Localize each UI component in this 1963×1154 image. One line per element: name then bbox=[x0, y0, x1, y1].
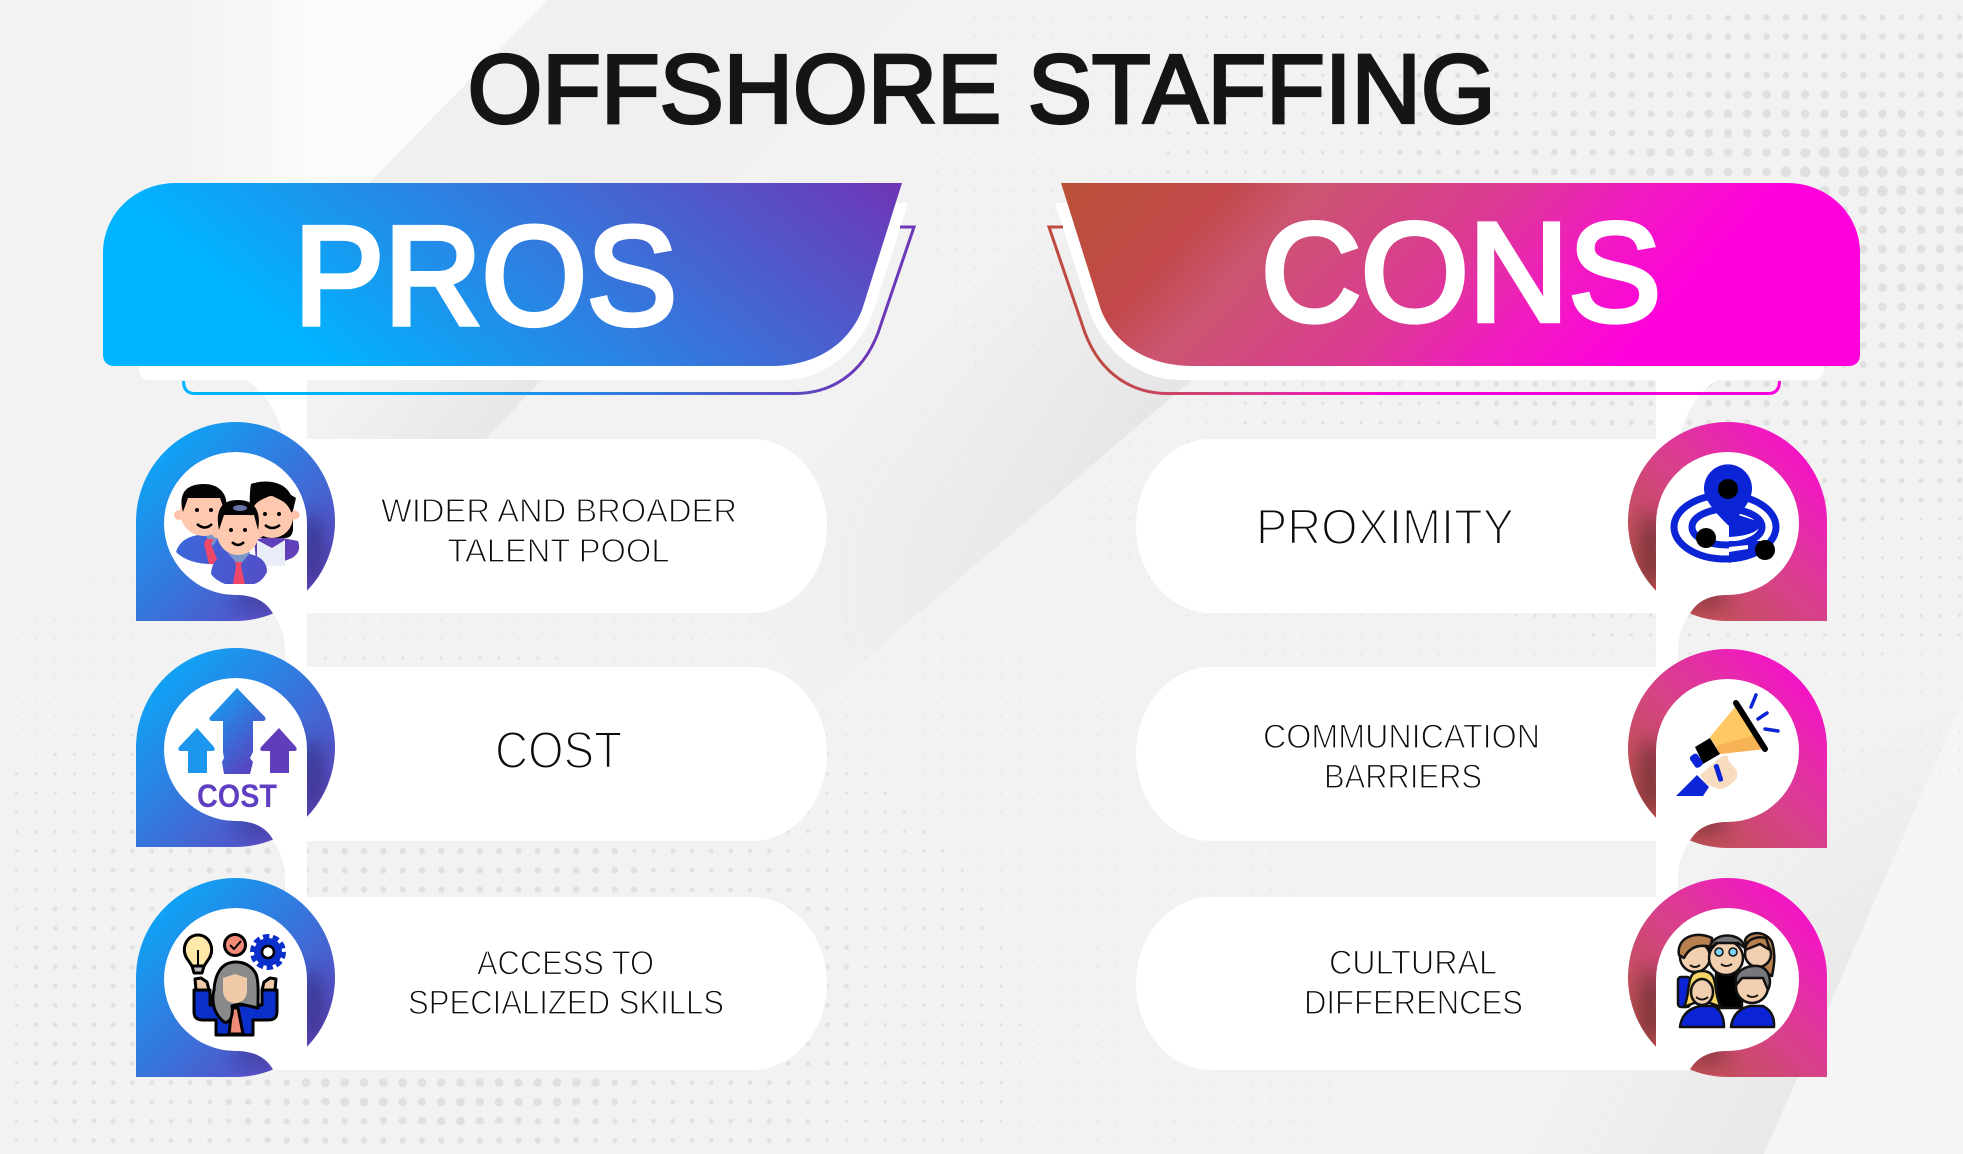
pin: cost bbox=[136, 648, 335, 847]
card: cultural differences bbox=[1136, 897, 1678, 1070]
cons heading: CONS bbox=[1261, 194, 1661, 350]
card: access to specialized skills: SPECIALIZED SKILLS bbox=[408, 984, 724, 1022]
pros connector stem bbox=[246, 380, 307, 908]
cons connector stem bbox=[1656, 380, 1717, 908]
card: cost bbox=[285, 667, 827, 841]
icon: location orbit bbox=[1674, 464, 1776, 563]
card: proximity: PROXIMITY bbox=[1256, 499, 1514, 555]
panel: pros column bbox=[103, 183, 914, 1077]
pros heading: PROS bbox=[294, 197, 677, 354]
icon: professional with ideas bbox=[184, 934, 283, 1035]
icon: cost arrows: COST bbox=[197, 778, 277, 814]
cons banner bbox=[1061, 183, 1860, 366]
pin: communication barriers bbox=[1628, 649, 1827, 848]
card: wider and broader talent pool bbox=[285, 439, 827, 613]
card: proximity bbox=[1136, 439, 1678, 613]
card: communication barriers bbox=[1136, 667, 1678, 841]
title: OFFSHORE STAFFING bbox=[468, 34, 1496, 143]
pin: specialized skills bbox=[136, 878, 335, 1077]
icon: three team members bbox=[174, 482, 300, 584]
card: wider and broader talent pool: WIDER AND BROADER bbox=[381, 493, 737, 530]
pros banner bbox=[103, 183, 902, 366]
card: wider and broader talent pool: TALENT POOL bbox=[448, 533, 670, 570]
icon: diverse group of people bbox=[1678, 933, 1774, 1027]
card: access to specialized skills bbox=[285, 897, 827, 1070]
icon: cost arrows bbox=[178, 688, 297, 814]
card: cost: COST bbox=[495, 722, 622, 780]
card: cultural differences: CULTURAL bbox=[1329, 944, 1497, 982]
card: access to specialized skills: ACCESS TO bbox=[477, 944, 654, 982]
cons banner offset white layer bbox=[1055, 203, 1824, 380]
cons banner outline bbox=[1049, 227, 1780, 394]
pin: talent pool bbox=[136, 422, 335, 621]
card: cultural differences: DIFFERENCES bbox=[1304, 984, 1523, 1022]
pros banner offset white layer bbox=[139, 203, 908, 380]
card: communication barriers: COMMUNICATION bbox=[1263, 718, 1540, 756]
pin: cultural differences bbox=[1628, 878, 1827, 1077]
pin: proximity bbox=[1628, 422, 1827, 621]
card: communication barriers: BARRIERS bbox=[1324, 758, 1482, 796]
pros banner outline bbox=[184, 227, 914, 394]
panel: cons column bbox=[1049, 183, 1860, 1077]
icon: megaphone in hand bbox=[1676, 695, 1778, 796]
